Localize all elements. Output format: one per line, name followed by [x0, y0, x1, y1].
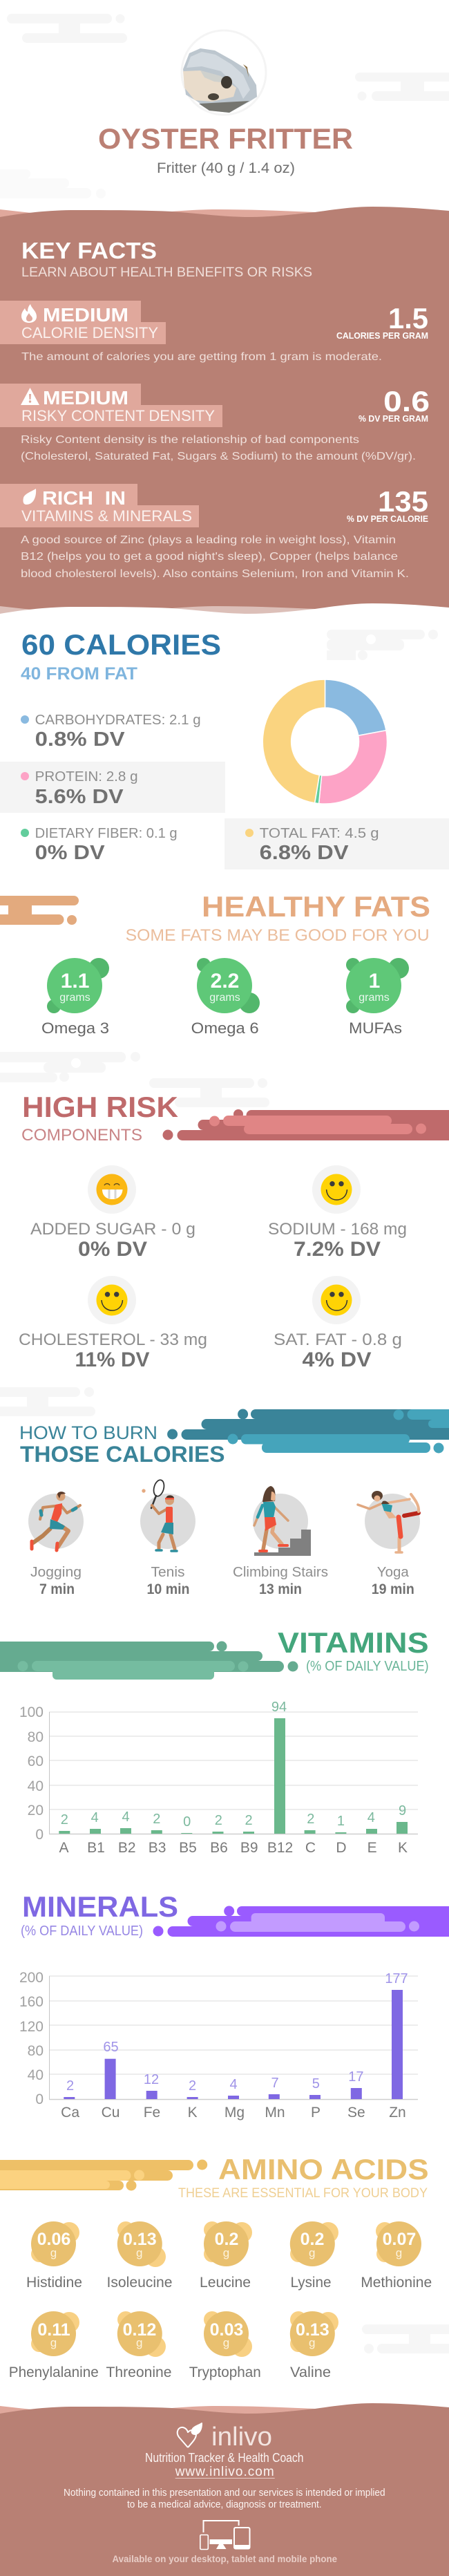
item: sodium [268, 1165, 407, 1261]
item: sodium: SODIUM - 168 mg [268, 1220, 407, 1239]
background clouds: high risk [0, 1052, 269, 1107]
heading: VITAMINS [278, 1626, 429, 1659]
wave bottom back [0, 606, 315, 618]
bar chart: minerals: Fe [144, 2105, 160, 2121]
disclaimer: to be a medical advice, diagnosis or treatment. [127, 2499, 322, 2510]
subheading: (% OF DAILY VALUE) [21, 1924, 143, 1939]
legend: protein: 5.6% DV [35, 786, 124, 808]
amino: lysine: Lysine [290, 2275, 332, 2291]
panel: minerals [19, 1890, 449, 2121]
bar chart: vitamins: B3 [149, 1840, 166, 1856]
bar chart: vitamins: A [59, 1840, 69, 1856]
amino: threonine: Threonine [106, 2365, 171, 2380]
value: 1.5 [388, 302, 428, 335]
bar chart: vitamins: B6 [210, 1840, 228, 1856]
bar chart: minerals: 2 [66, 2078, 74, 2094]
amino: phenylalanine: Phenylalanine [9, 2365, 99, 2380]
heading line 2: THOSE CALORIES [20, 1442, 225, 1467]
panel: healthy fats [0, 890, 430, 1037]
bar chart: minerals: 2 [189, 2078, 196, 2094]
icon: yoga pose [358, 1491, 419, 1552]
bar chart: vitamins: 2 [215, 1813, 222, 1828]
background cloud: burn section [0, 1387, 95, 1416]
amino: phenylalanine: 0.11 [37, 2320, 70, 2340]
legend: total fat: 6.8% DV [260, 842, 349, 864]
amino: valine: Valine [290, 2365, 331, 2380]
panel: how to burn those calories [19, 1409, 449, 1597]
amino: phenylalanine [9, 2311, 99, 2380]
panel: key facts [0, 207, 449, 628]
background clouds: header [0, 14, 449, 198]
legend: carbohydrates [21, 713, 201, 751]
heading: HIGH RISK [22, 1091, 178, 1123]
availability note: Available on your desktop, tablet and mobile phone [112, 2553, 337, 2564]
activity: climbing stairs: Climbing Stairs [233, 1565, 328, 1580]
bar chart: vitamins: 1 [337, 1814, 345, 1829]
amino: isoleucine: Isoleucine [106, 2275, 173, 2291]
heading: MINERALS [22, 1890, 178, 1923]
label: MEDIUM [43, 387, 128, 408]
description [21, 534, 409, 580]
icon: devices [200, 2521, 250, 2549]
amino: threonine: g [136, 2336, 142, 2349]
legend: protein: PROTEIN: 2.8 g [35, 769, 138, 784]
food image: oyster [182, 30, 266, 115]
bar chart: minerals: 160 [19, 1994, 44, 2010]
activity: yoga [358, 1491, 420, 1597]
amino: methionine [361, 2221, 432, 2291]
activity: yoga: 19 min [372, 1581, 414, 1597]
bar chart: minerals: 177 [385, 1971, 408, 1986]
subheading: SOME FATS MAY BE GOOD FOR YOU [126, 926, 430, 945]
legend: carbohydrates: CARBOHYDRATES: 2.1 g [35, 713, 201, 728]
bar chart: minerals: 7 [271, 2076, 279, 2091]
amino: tryptophan [189, 2311, 261, 2380]
bar chart: vitamins: K [398, 1840, 408, 1856]
value: 0.6 [383, 385, 430, 417]
decoration: green stripes [0, 1641, 298, 1680]
background cloud [327, 630, 438, 660]
bar chart: vitamins: 2 [245, 1813, 253, 1828]
decoration: teal stripes [167, 1409, 449, 1453]
activity: tennis: 10 min [146, 1581, 189, 1597]
amino: isoleucine: g [136, 2246, 142, 2259]
value: 135 [378, 485, 428, 518]
amino: phenylalanine: g [50, 2336, 57, 2349]
description: blood cholesterol levels). Also contains Selenium, Iron and Vitamin K. [21, 568, 409, 580]
subheading: LEARN ABOUT HEALTH BENEFITS OR RISKS [21, 265, 312, 280]
bar chart: vitamins: 94 [271, 1700, 287, 1715]
description: The amount of calories you are getting from 1 gram is moderate. [21, 351, 382, 363]
item: added sugar: 0% DV [78, 1238, 147, 1261]
description: (Cholesterol, Saturated Fat, Sugars & Sodium) to the amount (%DV/gr). [21, 451, 416, 462]
bar chart: minerals: 12 [144, 2072, 159, 2087]
bar chart: vitamins: 4 [91, 1810, 99, 1825]
bar chart: minerals: 5 [312, 2076, 320, 2091]
bubble: mufas [346, 958, 409, 1037]
amino: histidine: Histidine [26, 2275, 82, 2291]
bar chart: minerals: 200 [19, 1970, 44, 1986]
bar chart: vitamins: 60 [28, 1754, 44, 1769]
amino: tryptophan: g [223, 2336, 229, 2349]
sublabel: RISKY CONTENT DENSITY [21, 407, 215, 424]
sublabel: CALORIE DENSITY [21, 324, 158, 341]
bubble: omega 6 [191, 958, 260, 1037]
amino: histidine: 0.06 [37, 2230, 70, 2249]
logo: inlivo heart [178, 2423, 202, 2447]
panel background [0, 207, 449, 619]
bar chart: vitamins: 9 [399, 1803, 406, 1818]
bubble: omega 6: Omega 6 [191, 1019, 259, 1037]
legend: total fat: TOTAL FAT: 4.5 g [260, 826, 379, 841]
amino: leucine: 0.2 [215, 2230, 238, 2249]
amino: threonine [106, 2311, 171, 2380]
subheading: THESE ARE ESSENTIAL FOR YOUR BODY [178, 2185, 428, 2201]
amino: methionine: Methionine [361, 2275, 432, 2291]
fact: risky content density [0, 384, 430, 462]
bar chart: minerals: Se [347, 2105, 365, 2121]
wave top back [0, 209, 315, 221]
subheading: (% OF DAILY VALUE) [306, 1659, 429, 1674]
activity: yoga: Yoga [377, 1565, 410, 1580]
activity: jogging [28, 1492, 84, 1597]
activity: jogging: Jogging [30, 1565, 82, 1580]
tagline: Nutrition Tracker & Health Coach [145, 2451, 304, 2465]
bar chart: vitamins: 4 [367, 1810, 375, 1825]
bar chart: minerals: 40 [28, 2067, 44, 2083]
legend: dietary fiber: DIETARY FIBER: 0.1 g [35, 826, 178, 841]
bubble: omega 3: grams [59, 992, 90, 1004]
item: cholesterol: 11% DV [75, 1348, 149, 1371]
bar chart: minerals: Mn [265, 2105, 285, 2121]
disclaimer: Nothing contained in this presentation and our services is intended or implied [64, 2487, 385, 2499]
sublabel: VITAMINS & MINERALS [21, 507, 192, 525]
bar chart: vitamins: C [305, 1840, 316, 1856]
heading: key facts: KEY FACTS [21, 238, 157, 263]
title: OYSTER FRITTER [98, 122, 353, 155]
icon: stairs climber [254, 1486, 311, 1556]
unit: % DV PER CALORIE [347, 514, 428, 524]
item: cholesterol [19, 1276, 207, 1371]
bar chart: vitamins: 2 [61, 1812, 68, 1827]
footer [0, 2403, 449, 2576]
bar chart: minerals: 120 [19, 2019, 44, 2035]
bar chart: vitamins: B5 [179, 1840, 197, 1856]
decoration: purple stripes [153, 1906, 449, 1937]
logo: wordmark: inlivo [211, 2423, 272, 2452]
bar chart: vitamins: B12 [267, 1840, 293, 1856]
amino: histidine: g [50, 2246, 57, 2259]
amino: valine: g [309, 2336, 315, 2349]
amino: lysine: 0.2 [300, 2230, 324, 2249]
activity: climbing stairs [233, 1486, 328, 1597]
activity: climbing stairs: 13 min [259, 1581, 302, 1597]
serving size: Fritter (40 g / 1.4 oz) [157, 160, 295, 176]
bar chart: minerals: Zn [389, 2105, 406, 2121]
description: A good source of Zinc (plays a leading role in weight loss), Vitamin [21, 534, 396, 546]
unit: % DV PER GRAM [359, 413, 428, 424]
amino: isoleucine [106, 2221, 173, 2291]
item: saturated fat: SAT. FAT - 0.8 g [274, 1331, 402, 1349]
bubble: omega 6: grams [209, 992, 240, 1004]
description: B12 (helps you to get a good night's sleep), Copper (helps balance [21, 551, 398, 563]
fact: calorie density [0, 301, 428, 363]
bubble: mufas: MUFAs [349, 1019, 402, 1037]
icon: jogger [32, 1492, 80, 1550]
label: MEDIUM [43, 304, 128, 326]
amino: methionine: 0.07 [383, 2230, 416, 2249]
bar chart: minerals: 17 [348, 2069, 364, 2085]
bar chart: minerals: Mg [224, 2105, 245, 2121]
item: saturated fat: 4% DV [303, 1348, 372, 1371]
bar chart: vitamins: 20 [28, 1803, 44, 1818]
bubble: omega 3: Omega 3 [41, 1019, 109, 1037]
bar chart: minerals: 65 [103, 2040, 119, 2055]
legend: protein [0, 762, 225, 813]
item: added sugar [30, 1165, 195, 1261]
decoration: orange stripes [0, 896, 79, 925]
activity: tennis: Tenis [151, 1565, 185, 1580]
activity: tennis [140, 1479, 195, 1597]
bar chart: vitamins: 0 [35, 1827, 44, 1843]
unit: CALORIES PER GRAM [336, 330, 428, 341]
bar chart: vitamins: 100 [19, 1704, 44, 1720]
panel: vitamins [0, 1626, 429, 1856]
bar chart: vitamins [19, 1700, 418, 1856]
legend: dietary fiber [21, 826, 178, 864]
bar chart: minerals: 0 [35, 2091, 44, 2107]
decoration: red stripes [163, 1109, 449, 1140]
heading line 1: HOW TO BURN [19, 1422, 157, 1443]
bubble: mufas: grams [359, 992, 390, 1004]
footer background [0, 2403, 449, 2576]
decoration: yellow stripes [0, 2159, 207, 2191]
disclaimer [64, 2487, 385, 2510]
amino: valine: 0.13 [296, 2320, 329, 2340]
bar chart: vitamins: 80 [28, 1729, 44, 1745]
amino: tryptophan: Tryptophan [189, 2365, 261, 2380]
subheading: COMPONENTS [21, 1126, 142, 1145]
bar chart: minerals: 4 [229, 2077, 238, 2092]
bubble: omega 3 [41, 958, 109, 1037]
amino: valine [290, 2311, 338, 2380]
website link: www.inlivo.com [175, 2465, 274, 2479]
bar chart: vitamins: B9 [240, 1840, 258, 1856]
activity: jogging: 7 min [39, 1581, 75, 1597]
donut chart [262, 679, 387, 804]
fact: rich in vitamins and minerals [0, 484, 428, 580]
amino: leucine: g [223, 2246, 229, 2259]
amino: histidine [26, 2221, 82, 2291]
icon: leaf [23, 489, 36, 505]
description [21, 434, 416, 462]
amino: tryptophan: 0.03 [210, 2320, 243, 2340]
bar chart: vitamins: B2 [118, 1840, 136, 1856]
icon: flame [21, 304, 37, 323]
legend: dietary fiber: 0% DV [35, 842, 105, 864]
heading: calories: 60 CALORIES [21, 628, 221, 661]
wave bottom front [0, 603, 449, 628]
bar chart: minerals: K [188, 2105, 198, 2121]
icon: warning triangle [21, 388, 39, 405]
item: added sugar: ADDED SUGAR - 0 g [30, 1220, 195, 1239]
description: Risky Content density is the relationship of bad components [21, 434, 359, 446]
panel: amino acids [0, 2153, 449, 2380]
amino: leucine: Leucine [200, 2275, 251, 2291]
bar chart: vitamins: 2 [153, 1812, 160, 1827]
bar chart: vitamins: D [336, 1840, 347, 1856]
heading: AMINO ACIDS [218, 2153, 429, 2185]
bubble: omega 6: 2.2 [211, 970, 239, 993]
heading: HEALTHY FATS [202, 890, 430, 923]
bar chart: vitamins: 2 [307, 1812, 314, 1827]
bar chart: vitamins: B1 [87, 1840, 105, 1856]
bar chart: minerals: Ca [61, 2105, 79, 2121]
amino: lysine: g [309, 2246, 315, 2259]
panel: high risk [19, 1091, 449, 1371]
bar chart: minerals: P [311, 2105, 321, 2121]
item: saturated fat [274, 1276, 402, 1371]
bubble: omega 3: 1.1 [61, 970, 89, 993]
amino: isoleucine: 0.13 [123, 2230, 157, 2249]
bar chart: vitamins: 40 [28, 1778, 44, 1794]
bar chart: vitamins: E [367, 1840, 377, 1856]
bar chart: vitamins: 0 [183, 1814, 191, 1830]
bar chart: minerals: 80 [28, 2043, 44, 2059]
bar chart: minerals: Cu [102, 2105, 120, 2121]
legend: total fat [224, 818, 449, 869]
legend: carbohydrates: 0.8% DV [35, 728, 125, 751]
panel: calories [0, 628, 449, 869]
bubble: mufas: 1 [369, 970, 380, 993]
label: RICH IN [42, 487, 126, 509]
amino: threonine: 0.12 [123, 2320, 156, 2340]
icon: tennis player [142, 1479, 177, 1551]
wave back [0, 2406, 315, 2418]
amino: lysine [290, 2221, 338, 2291]
bar chart: minerals [19, 1970, 418, 2121]
bar chart: vitamins: 4 [122, 1809, 130, 1825]
item: sodium: 7.2% DV [294, 1238, 381, 1261]
background cloud: amino [362, 2324, 449, 2353]
amino: methionine: g [396, 2246, 402, 2259]
subheading: 40 FROM FAT [21, 664, 137, 684]
item: cholesterol: CHOLESTEROL - 33 mg [19, 1331, 207, 1349]
amino: leucine [200, 2221, 252, 2291]
